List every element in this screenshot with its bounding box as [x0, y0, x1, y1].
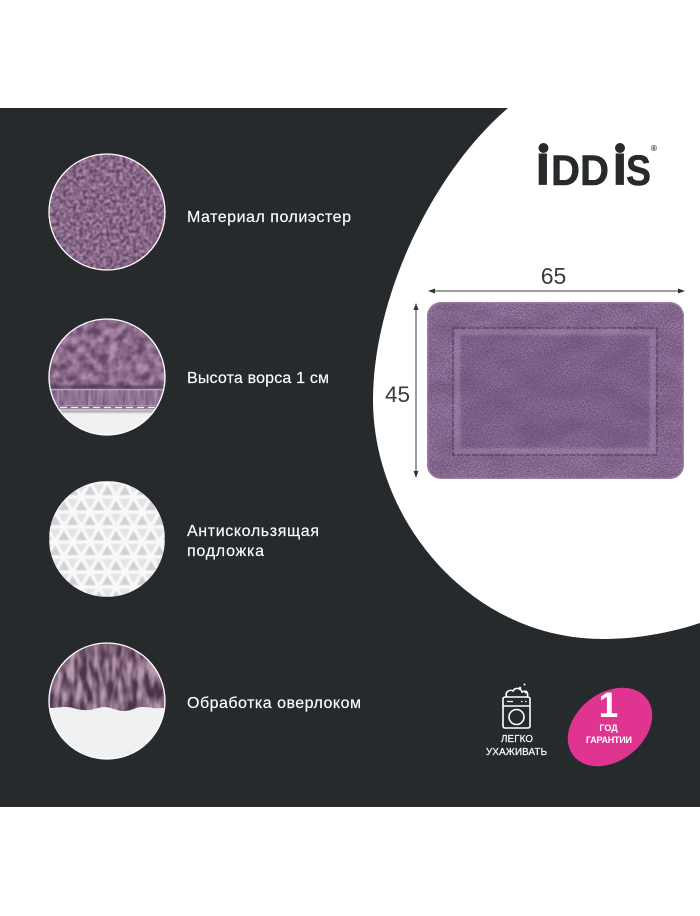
badge: 1 year warranty: 1 — [599, 686, 618, 725]
logo: IDDIS — [534, 131, 657, 198]
dark background panel — [0, 108, 700, 807]
feature: anti-slip backing — [49, 481, 319, 597]
icon: washing machine with foam — [503, 684, 530, 728]
label: overlock: Обработка оверлоком — [187, 695, 361, 712]
feature: overlock edging — [49, 640, 361, 759]
height dimension: 45: 45 — [385, 382, 410, 407]
logo: IDDIS: i — [612, 131, 628, 198]
label: material: Материал полиэстер — [187, 209, 351, 226]
logo: IDDIS: S — [626, 147, 651, 195]
badge: 1 year warranty — [552, 672, 668, 782]
photo: overlock edge — [49, 640, 165, 759]
logo: IDDIS: ® — [651, 144, 657, 153]
photo: pile close-up — [49, 154, 165, 270]
product photo: purple bath mat — [427, 302, 684, 479]
photo: backing pattern — [49, 481, 165, 597]
badge: 1 year warranty: ГАРАНТИИ — [586, 735, 632, 745]
photo: pile height side view — [49, 319, 165, 435]
white curved product area — [373, 108, 700, 639]
width dimension: 65 — [428, 263, 685, 294]
feature: pile height — [49, 319, 329, 435]
height dimension: 45 — [385, 303, 418, 478]
width dimension: 65: 65 — [541, 263, 566, 289]
badge: 1 year warranty: ГОД — [599, 723, 618, 733]
logo: IDDIS: D — [580, 147, 609, 195]
feature: polyester material — [49, 154, 351, 270]
caption: easy care: УХАЖИВАТЬ — [486, 747, 547, 758]
logo: IDDIS: D — [551, 147, 580, 195]
caption: easy care: ЛЕГКО — [501, 734, 533, 745]
logo: IDDIS: i — [534, 131, 551, 198]
label: anti-slip: Антискользящая — [187, 523, 319, 540]
label: anti-slip: подложка — [187, 543, 264, 560]
label: pile height: Высота ворса 1 см — [187, 370, 329, 387]
